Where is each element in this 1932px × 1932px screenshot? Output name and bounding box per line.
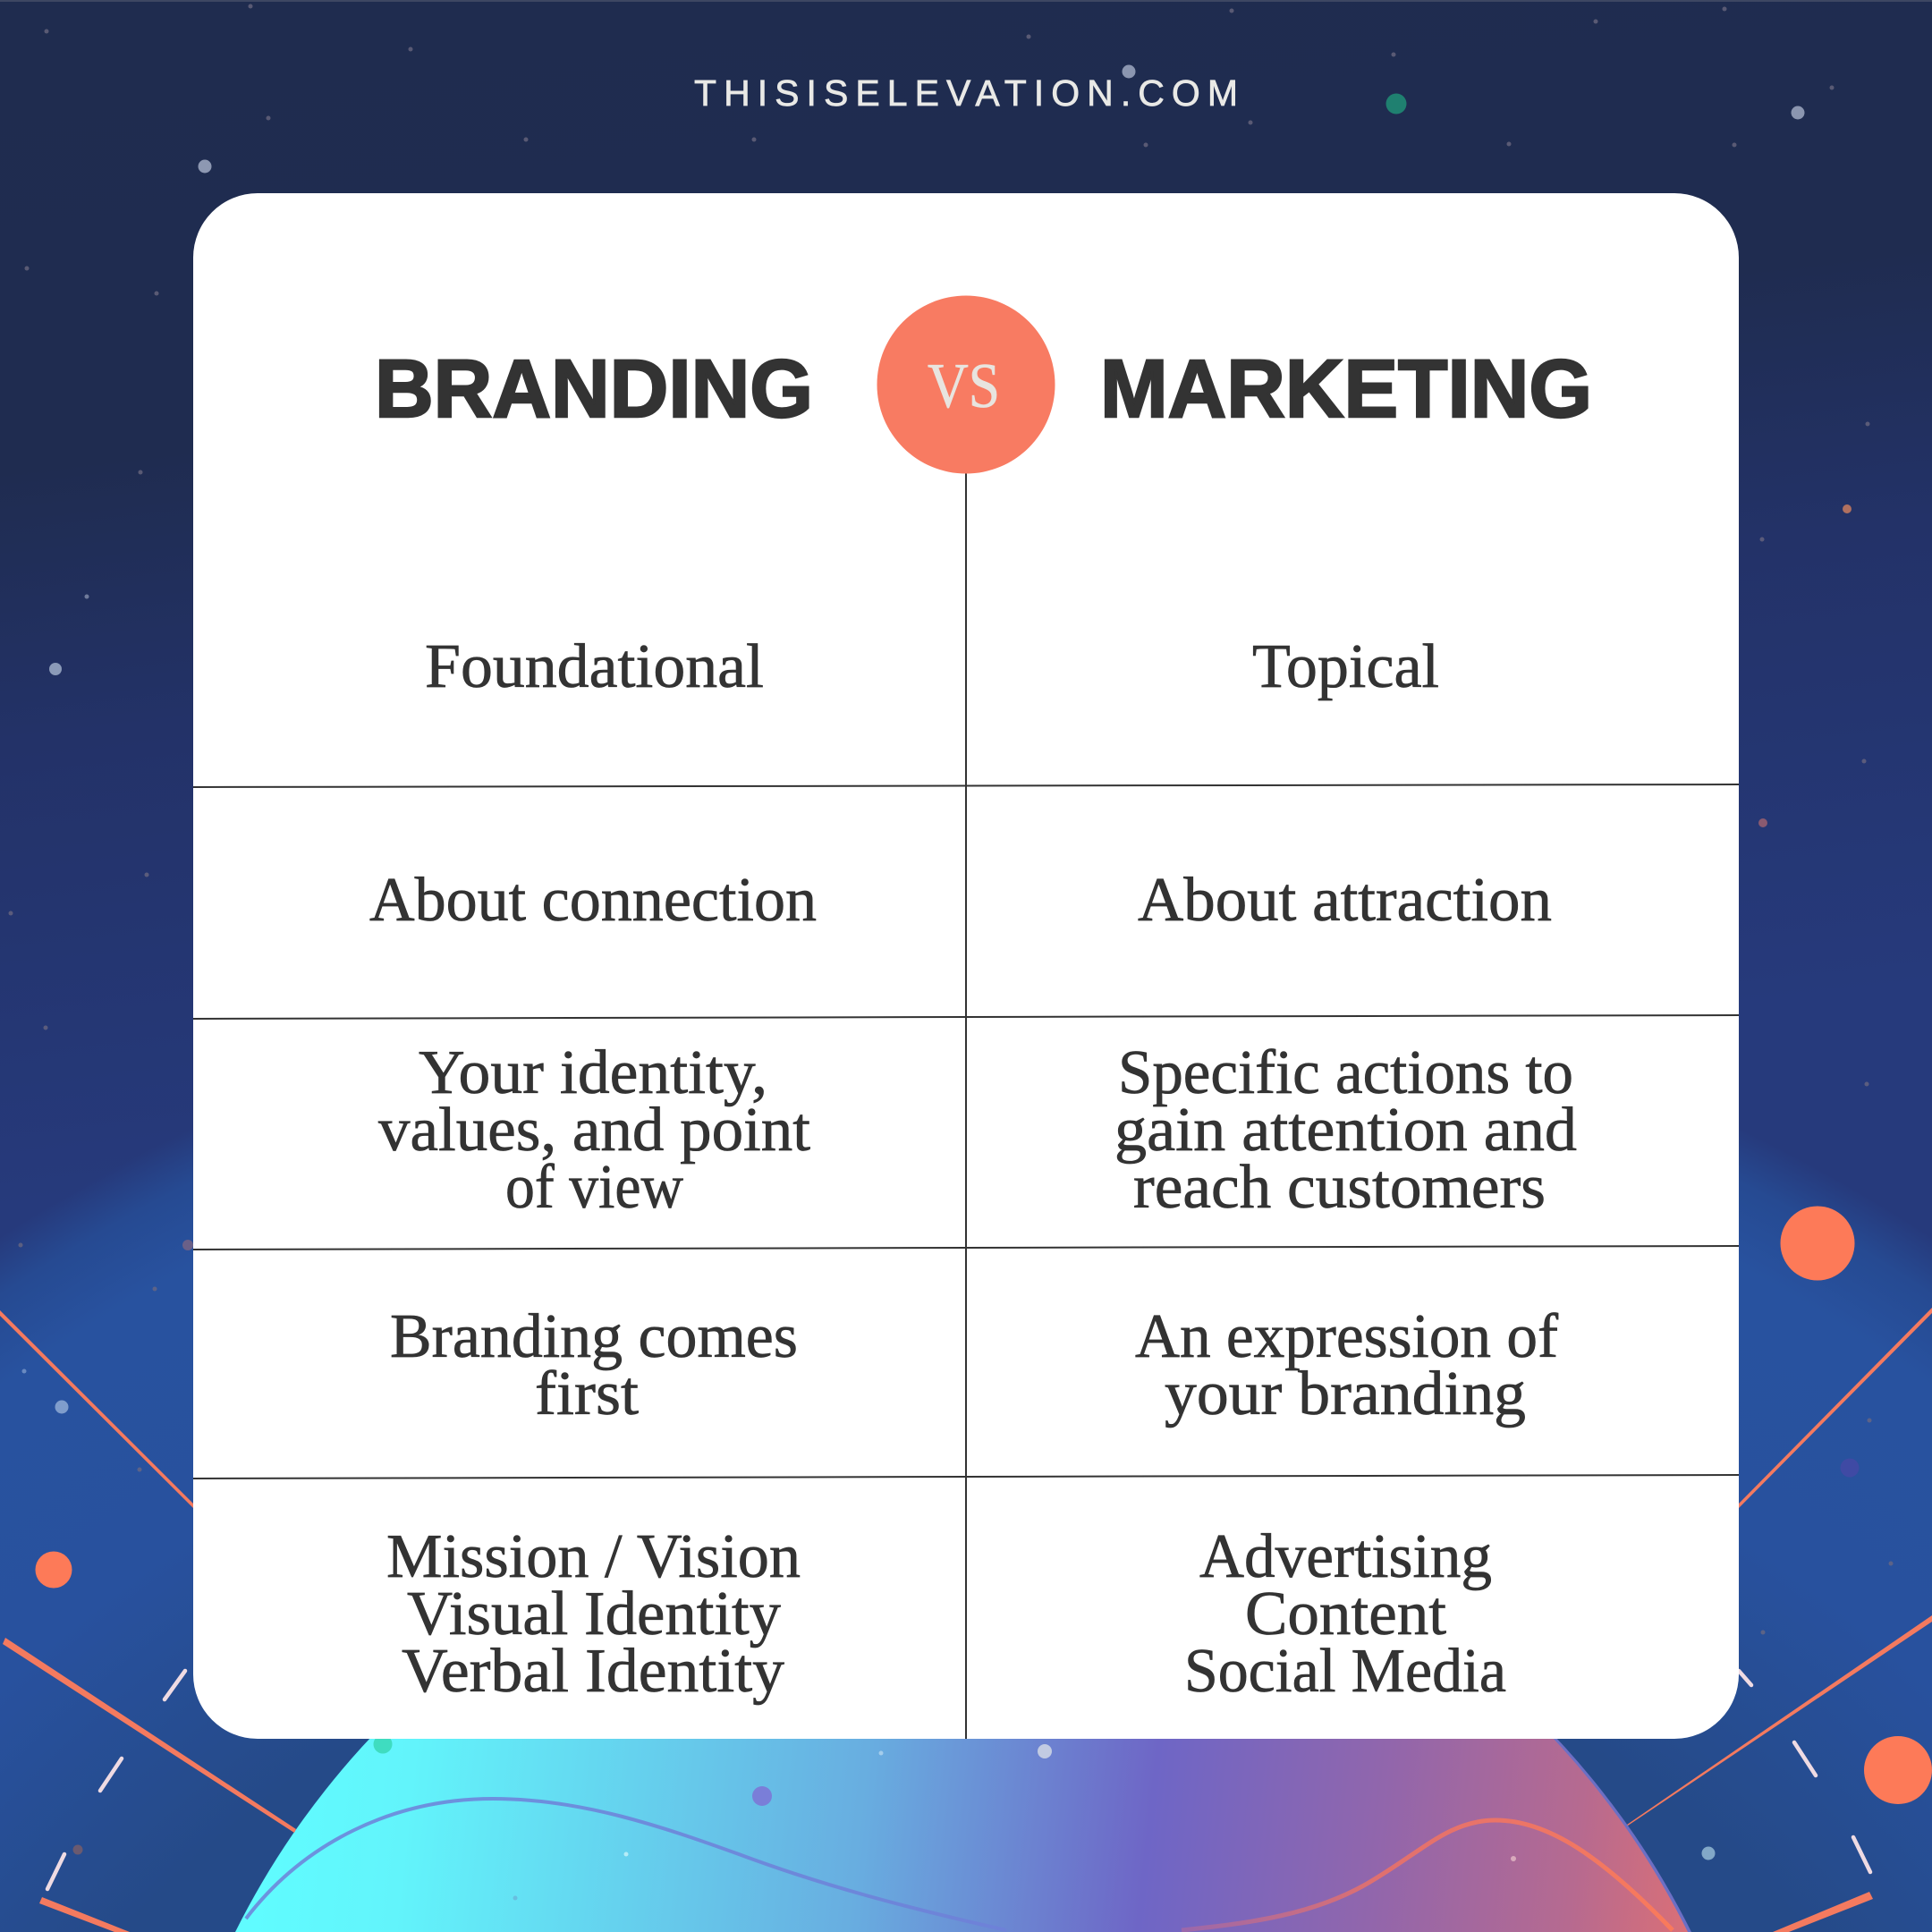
row 4 left: first xyxy=(535,1360,640,1428)
row 3 left: values, and point xyxy=(378,1096,811,1165)
row 3 right xyxy=(1114,1038,1577,1222)
top URL heading: THISISELEVATION.COM xyxy=(694,72,1238,114)
vs badge: VS xyxy=(928,352,1000,421)
row 3 left: of view xyxy=(505,1153,683,1222)
row 4 left xyxy=(390,1302,798,1428)
row 4 left: Branding comes xyxy=(390,1302,798,1371)
row 5 left: Visual Identity xyxy=(407,1580,781,1648)
row 5 right xyxy=(1184,1522,1506,1706)
orange beam lines xyxy=(0,1308,1932,1932)
row 5 right: Advertising xyxy=(1199,1522,1492,1591)
white dashes xyxy=(47,1671,1870,1889)
row 3 right: gain attention and xyxy=(1114,1096,1577,1165)
row 3 left xyxy=(378,1038,811,1222)
table dividers xyxy=(193,473,1739,1739)
planet: gradient sphere at the bottom xyxy=(235,1482,1691,1932)
orange planets xyxy=(36,1206,1932,1804)
heading: branding: BRANDING xyxy=(375,343,813,435)
row 2 left: About connection xyxy=(369,866,817,935)
row 5 left: Verbal Identity xyxy=(402,1637,784,1706)
row 1 left: Foundational xyxy=(425,632,764,701)
row 4 right: your branding xyxy=(1165,1360,1526,1428)
row 4 right: An expression of xyxy=(1135,1302,1559,1371)
row 5 right: Social Media xyxy=(1184,1637,1506,1706)
row 2 right: About attraction xyxy=(1138,866,1552,935)
row 3 left: Your identity, xyxy=(419,1038,767,1107)
row 1 right: Topical xyxy=(1252,632,1439,701)
row 4 right xyxy=(1135,1302,1559,1428)
row 5 right: Content xyxy=(1245,1580,1447,1648)
row 5 left xyxy=(386,1522,801,1706)
heading: marketing: MARKETING xyxy=(1100,343,1592,435)
row 3 right: reach customers xyxy=(1133,1153,1546,1222)
panel: white comparison card xyxy=(193,193,1739,1739)
vs badge xyxy=(877,295,1055,474)
row 3 right: Specific actions to xyxy=(1118,1038,1573,1107)
row 5 left: Mission / Vision xyxy=(386,1522,801,1591)
